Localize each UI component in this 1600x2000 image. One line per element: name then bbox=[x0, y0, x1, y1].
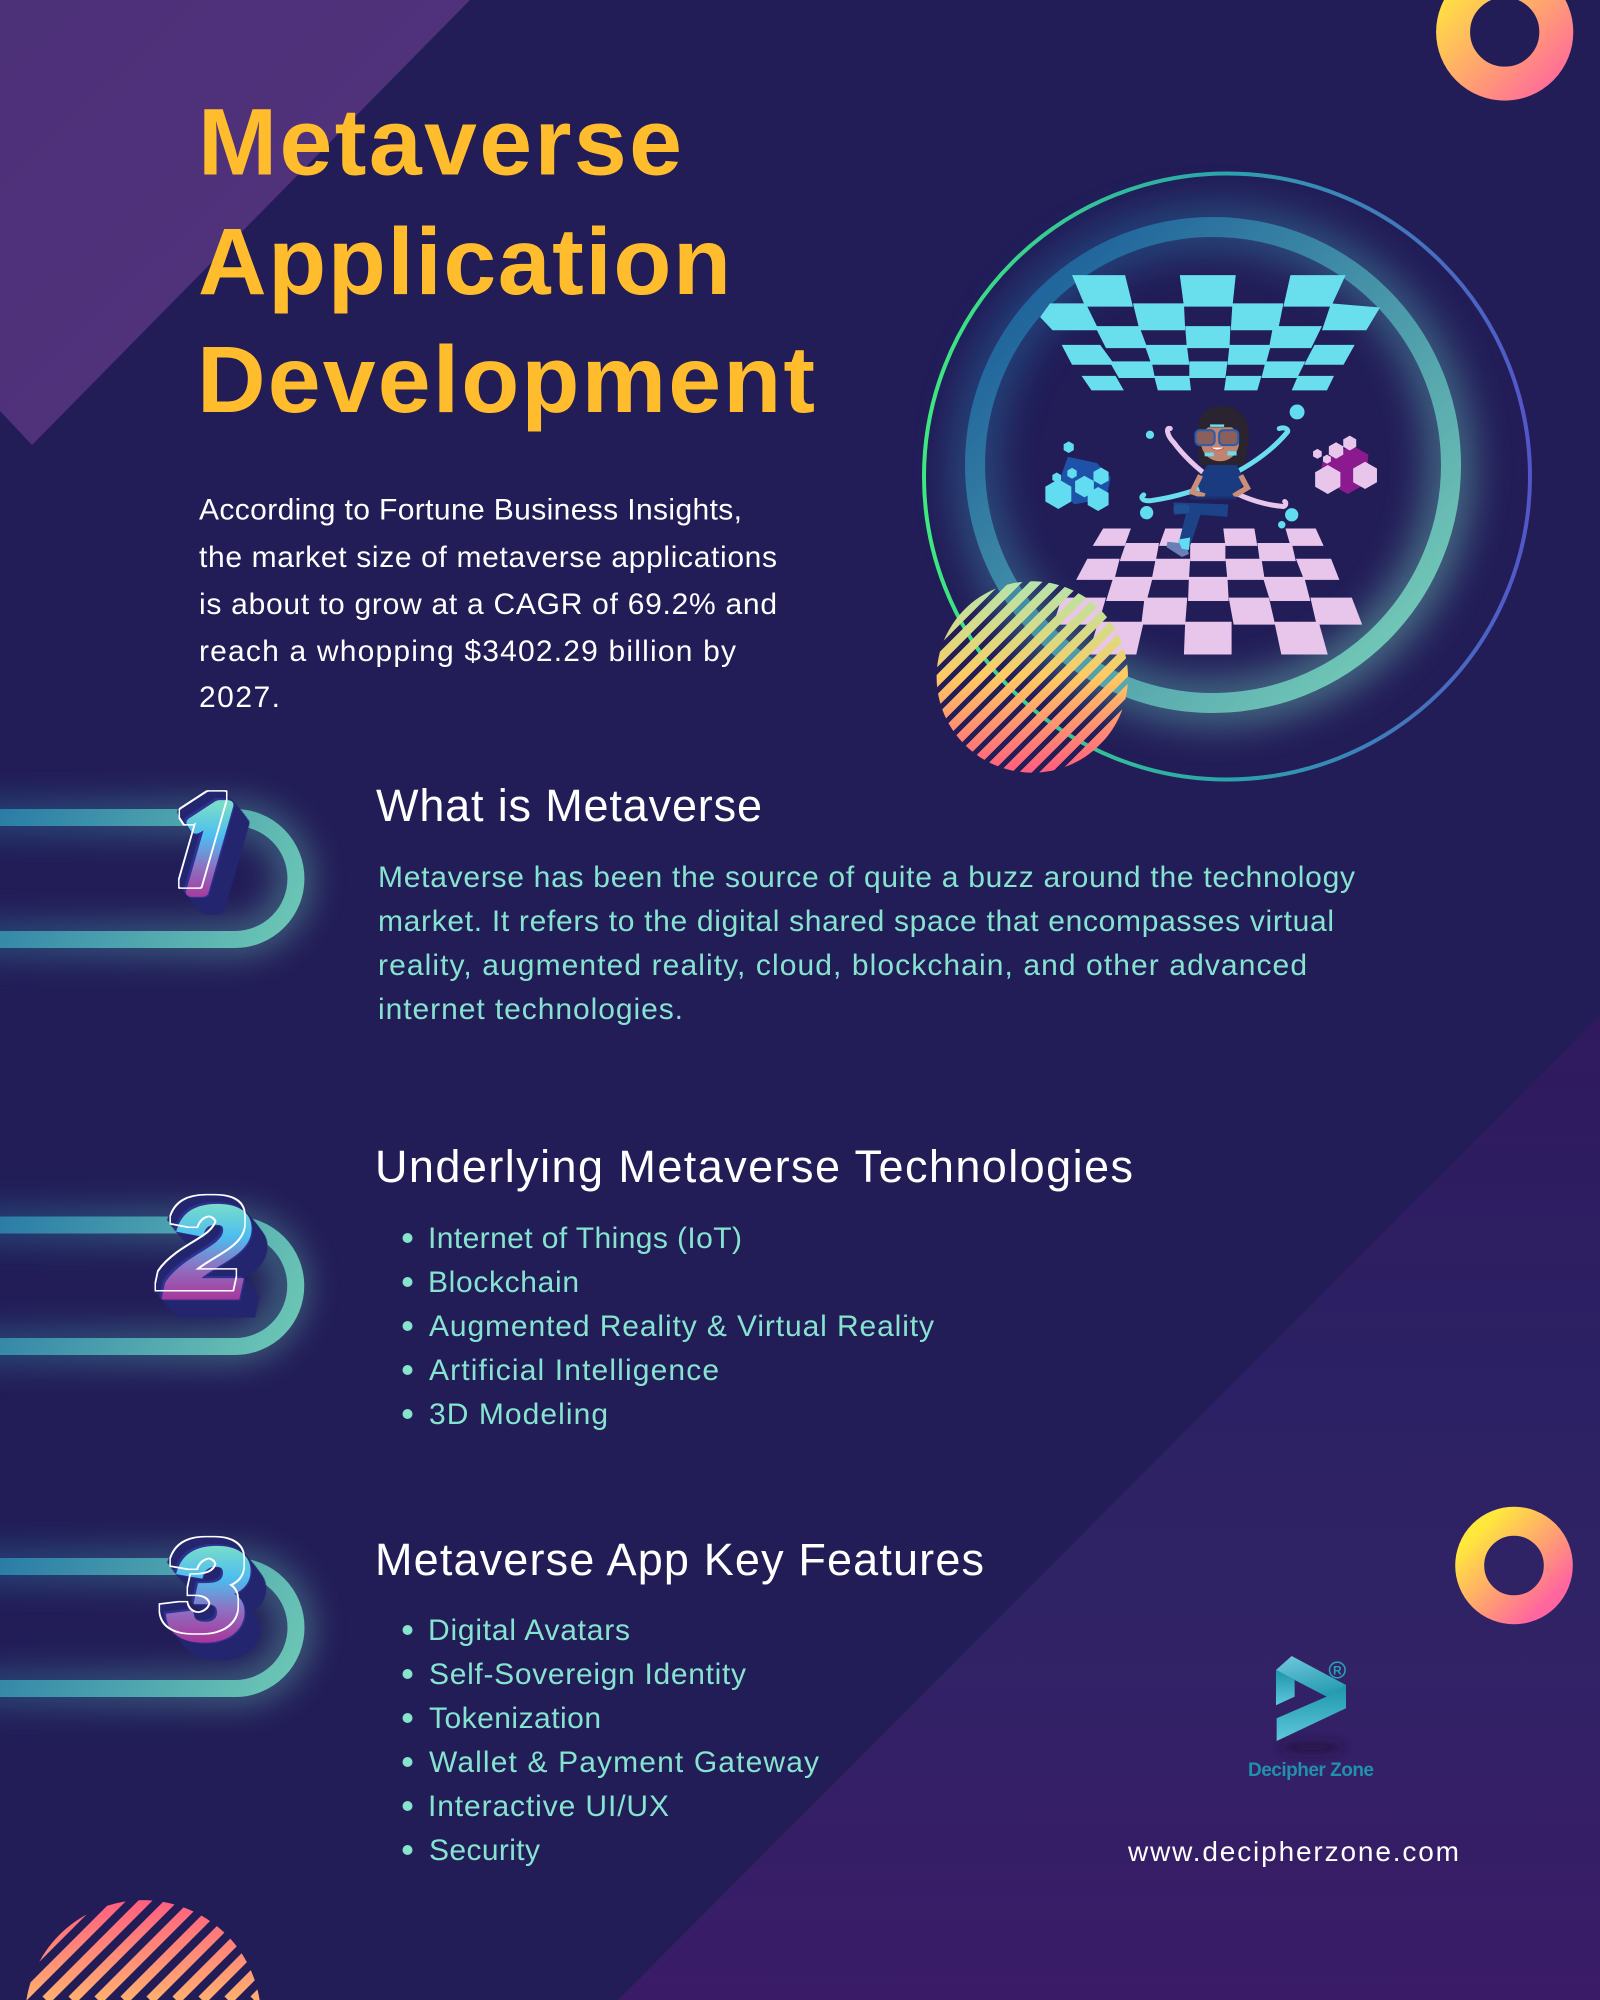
title: Metaverse bbox=[198, 90, 682, 196]
section 3 heading: Metaverse App Key Features bbox=[375, 1534, 984, 1585]
number badge 3: 3 bbox=[162, 1514, 241, 1656]
cyan and pink orbit curves bbox=[1142, 428, 1288, 506]
track band 2 bbox=[0, 1225, 296, 1346]
number badge 2: 2 bbox=[161, 1172, 242, 1314]
section 3 bullet list: Tokenization bbox=[429, 1702, 601, 1735]
section 3 bullet list: Wallet & Payment Gateway bbox=[429, 1746, 819, 1779]
section 1 paragraph bbox=[378, 861, 1355, 1026]
background: bottom-right purple shape bbox=[618, 1015, 1600, 2000]
track band 1 bbox=[0, 818, 296, 940]
section 3 bullet list bbox=[402, 1614, 819, 1867]
intro text block: 2027. bbox=[199, 681, 280, 714]
section 3 bullet list: Digital Avatars bbox=[428, 1614, 630, 1647]
intro text block: According to Fortune Business Insights, bbox=[199, 494, 742, 526]
section 2 bullet list bbox=[402, 1222, 934, 1431]
torso bbox=[1196, 463, 1245, 497]
section 2 bullet list: 3D Modeling bbox=[429, 1398, 608, 1431]
hair bbox=[1198, 406, 1249, 465]
logo mark bbox=[1276, 1656, 1346, 1741]
intro text block: the market size of metaverse applications bbox=[199, 541, 777, 574]
laptop bbox=[1190, 497, 1237, 499]
logo wordmark: Decipher Zone bbox=[1248, 1760, 1374, 1781]
section 2: underlying technologies bbox=[375, 1141, 1133, 1431]
icon: lower-right gradient donut bbox=[1470, 1521, 1558, 1610]
avatar character bbox=[1167, 406, 1249, 557]
section 1 paragraph: reality, augmented reality, cloud, blockchain, and other advanced bbox=[378, 949, 1307, 982]
website url: www.decipherzone.com bbox=[1127, 1836, 1459, 1867]
inner ring glow bbox=[975, 227, 1451, 703]
pink checker floor bbox=[1053, 528, 1362, 654]
section 1 paragraph: internet technologies. bbox=[378, 993, 683, 1026]
outer thin ring bbox=[924, 174, 1530, 780]
arms bbox=[1192, 475, 1205, 496]
icon: top-right gradient donut bbox=[1453, 0, 1556, 84]
section 2 bullet list: Blockchain bbox=[428, 1266, 579, 1299]
title bbox=[197, 90, 815, 433]
title: Application bbox=[198, 209, 731, 315]
intro text block: reach a whopping $3402.29 billion by bbox=[199, 635, 736, 668]
intro text block: is about to grow at a CAGR of 69.2% and bbox=[199, 588, 777, 621]
section 2 bullet list: Artificial Intelligence bbox=[429, 1354, 719, 1387]
section 3 bullet list: Security bbox=[429, 1834, 540, 1867]
registered mark: R bbox=[1333, 1664, 1342, 1678]
legs bbox=[1174, 502, 1228, 546]
section 3 bullet list: Self-Sovereign Identity bbox=[429, 1658, 746, 1691]
section 3 bullet list: Interactive UI/UX bbox=[428, 1790, 669, 1823]
smile bbox=[1211, 448, 1224, 450]
background: top-left purple shape bbox=[0, 0, 470, 445]
intro text block bbox=[199, 494, 777, 714]
striped gradient circle bbox=[936, 581, 1128, 773]
section 1 paragraph: Metaverse has been the source of quite a buzz around the technology bbox=[378, 861, 1355, 894]
title: Development bbox=[197, 327, 815, 433]
section 1 paragraph: market. It refers to the digital shared space that encompasses virtual bbox=[378, 905, 1334, 938]
number badge 1: 1 bbox=[145, 785, 228, 902]
artwork in crop coordinates bbox=[1040, 275, 1380, 654]
illustration: metaverse circle bbox=[922, 172, 1532, 782]
section 3: key features bbox=[375, 1534, 984, 1867]
visor marks bbox=[1210, 424, 1224, 427]
striped gradient circle bottom-left bbox=[26, 1900, 260, 2000]
cyan checker ceiling bbox=[1040, 275, 1380, 390]
section 1 heading: What is Metaverse bbox=[376, 780, 762, 831]
glasses bbox=[1196, 430, 1238, 445]
logo: Decipher Zone bbox=[1248, 1656, 1374, 1781]
section 2 bullet list: Internet of Things (IoT) bbox=[428, 1222, 742, 1255]
face bbox=[1201, 423, 1239, 461]
section 2 bullet list: Augmented Reality & Virtual Reality bbox=[429, 1310, 934, 1343]
purple cube cluster bbox=[1313, 436, 1377, 494]
logo shadow bbox=[1279, 1741, 1345, 1754]
floating dots bbox=[1140, 405, 1305, 528]
glowing track bands bbox=[0, 818, 296, 1688]
track band 3 bbox=[0, 1566, 296, 1688]
blue cube cluster bbox=[1045, 441, 1111, 511]
inner thick ring bbox=[975, 227, 1451, 703]
section 2 heading: Underlying Metaverse Technologies bbox=[375, 1141, 1133, 1192]
section 1: what is metaverse bbox=[376, 780, 1355, 1026]
